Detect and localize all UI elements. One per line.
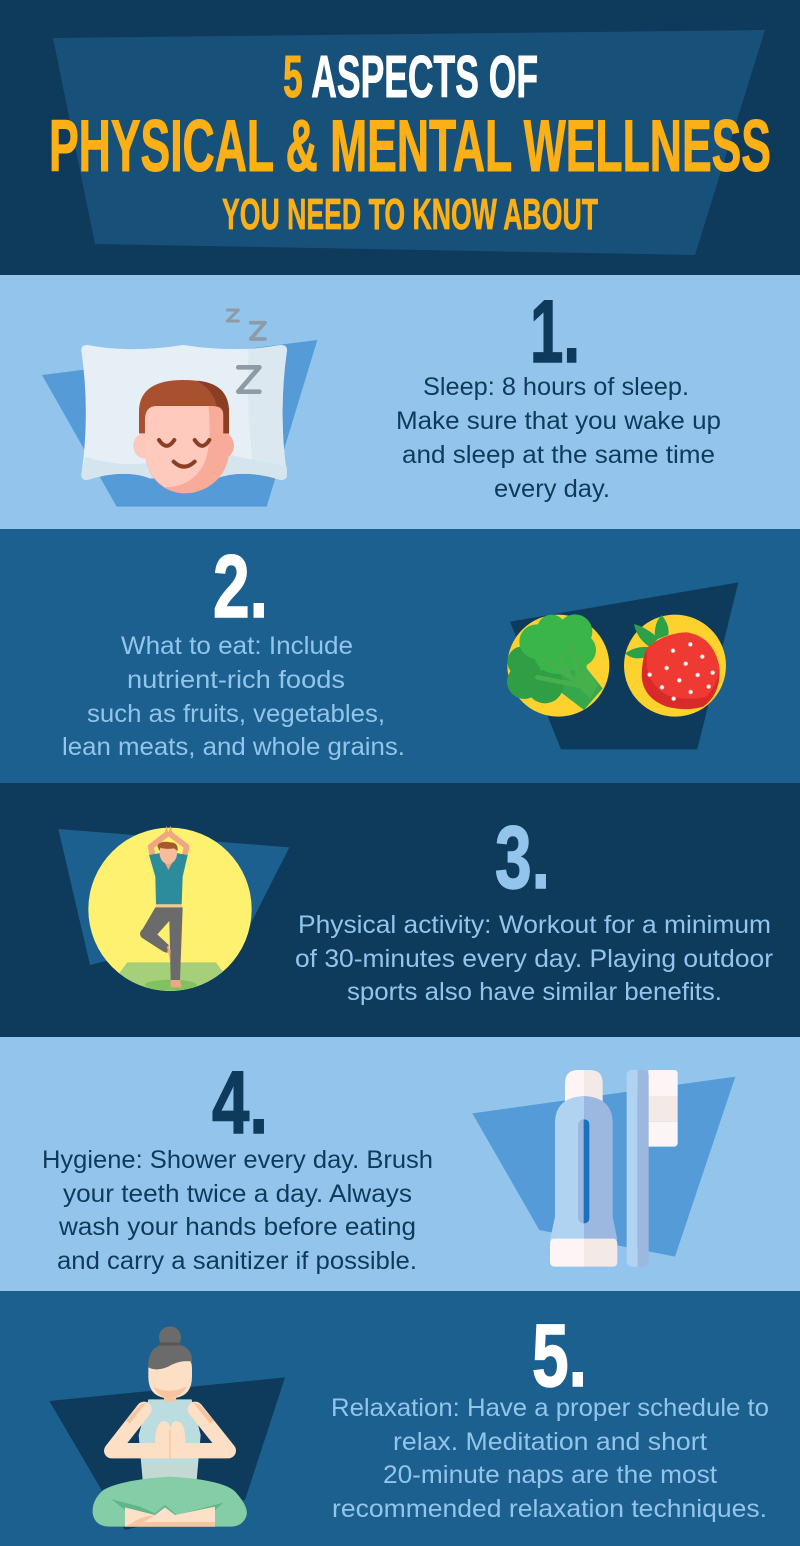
text: sleep: Sleep: 8 hours of sleep. — [423, 373, 689, 401]
panel: food — [0, 529, 800, 783]
text: physical activity — [295, 911, 773, 1006]
text: food — [62, 632, 405, 761]
number 2: 2. — [213, 536, 268, 636]
text: physical activity: sports also have similar benefits. — [347, 978, 722, 1006]
text: relaxation: Relaxation: Have a proper schedule to — [331, 1394, 769, 1422]
text: hygiene: your teeth twice a day. Always — [63, 1180, 412, 1208]
title line 1: 5 ASPECTS OF — [283, 44, 538, 110]
text: food: What to eat: Include — [121, 632, 353, 660]
panel: relaxation — [0, 1291, 800, 1546]
panel: hygiene — [0, 1037, 800, 1291]
text: food: lean meats, and whole grains. — [62, 733, 405, 761]
icon: broccoli and strawberry — [507, 582, 738, 749]
number 3: 3. — [495, 807, 550, 907]
number 1: 1. — [530, 281, 580, 381]
icon: sleeping head on pillow — [42, 310, 317, 507]
text: hygiene: Hygiene: Shower every day. Brush — [42, 1146, 433, 1174]
text: physical activity: of 30-minutes every day. Playing outdoor — [295, 945, 773, 973]
panel: sleep — [0, 275, 800, 529]
text: sleep: every day. — [494, 475, 610, 503]
text: relaxation — [331, 1394, 769, 1523]
number 4: 4. — [212, 1052, 268, 1152]
text: food: such as fruits, vegetables, — [87, 700, 385, 728]
text: hygiene: and carry a sanitizer if possible. — [57, 1247, 417, 1275]
text: sleep: and sleep at the same time — [402, 441, 715, 469]
panel: physical activity — [58, 825, 773, 1005]
text: sleep — [396, 373, 721, 503]
text: relaxation: relax. Meditation and short — [393, 1428, 707, 1456]
icon: toothpaste and toothbrush — [472, 1070, 735, 1267]
panel: header — [0, 0, 800, 275]
text: physical activity: Physical activity: Workout for a minimum — [298, 911, 771, 939]
number 5: 5. — [532, 1305, 587, 1405]
text: hygiene: wash your hands before eating — [58, 1213, 416, 1241]
text: hygiene — [42, 1146, 433, 1275]
text: food: nutrient-rich foods — [127, 666, 345, 694]
icon: tree pose figure — [58, 826, 289, 995]
icon: meditating woman — [49, 1326, 285, 1530]
text: relaxation: recommended relaxation techniques. — [332, 1495, 767, 1523]
text: relaxation: 20-minute naps are the most — [383, 1461, 717, 1489]
text: sleep: Make sure that you wake up — [396, 407, 721, 435]
